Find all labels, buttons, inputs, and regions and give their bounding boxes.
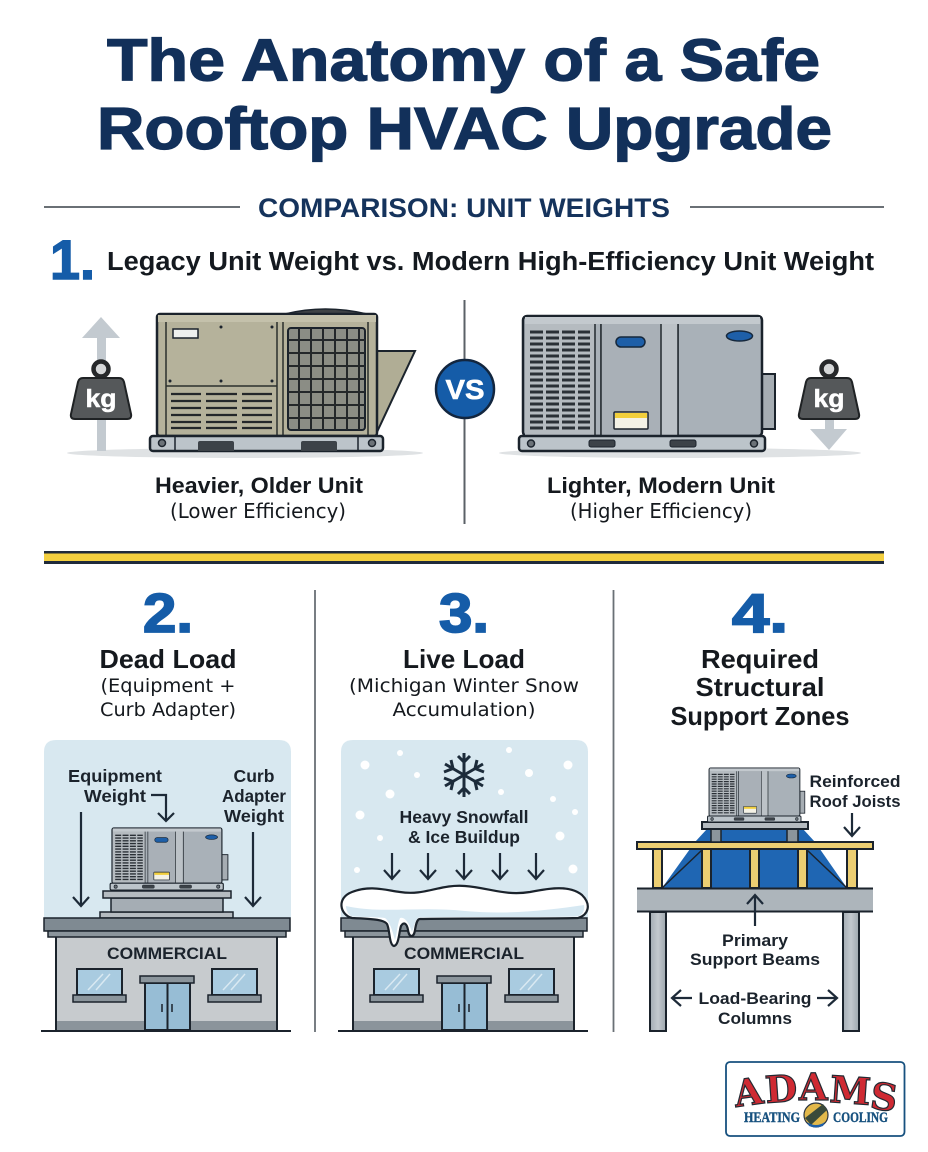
label: heavy snowfall: & Ice Buildup [408, 827, 520, 847]
label: equipment weight: Equipment [68, 766, 162, 786]
label: heavy snowfall [400, 807, 528, 847]
panel: modern unit [499, 316, 861, 523]
label: curb adapter weight: Adapter [222, 786, 286, 806]
heading: support zones [670, 582, 850, 731]
logo: Adams Heating & Cooling: HEATING [744, 1110, 800, 1126]
heading: dead load: 2. [143, 582, 193, 644]
icon: snowflake [444, 753, 484, 797]
section heading: comparison: COMPARISON: UNIT WEIGHTS [258, 193, 670, 223]
label: primary support beams: Primary [722, 931, 789, 950]
illustration panel: dead load [41, 740, 291, 1031]
heading: live load: Live Load [403, 644, 525, 674]
caption: heavier unit [155, 473, 364, 523]
label: load-bearing columns [672, 989, 837, 1028]
heading: dead load: Curb Adapter) [100, 699, 236, 721]
column 4: structural support [637, 582, 900, 1031]
heading: live load [349, 582, 579, 721]
icon: up arrow with weight [71, 317, 131, 451]
panel: legacy unit [67, 309, 423, 523]
heading: live load: (Michigan Winter Snow [349, 675, 579, 697]
caption: heavier unit: (Lower Efficiency) [170, 499, 346, 523]
label: curb adapter weight [222, 766, 286, 906]
label: reinforced roof joists [810, 772, 900, 836]
caption: lighter unit: Lighter, Modern Unit [547, 473, 776, 498]
label: reinforced roof joists: Reinforced [810, 772, 900, 791]
title [97, 28, 832, 162]
label: primary support beams: Support Beams [690, 950, 820, 969]
illustration: structural frame [637, 768, 873, 1031]
title: The Anatomy of a Safe [107, 28, 820, 94]
label: heavy snowfall: Heavy Snowfall [400, 807, 528, 827]
divider with VS badge: VS [446, 374, 484, 405]
illustration: commercial building [41, 918, 291, 1031]
illustration: commercial building: COMMERCIAL [404, 944, 524, 963]
title: Rooftop HVAC Upgrade [97, 96, 832, 162]
label: equipment weight [68, 766, 174, 906]
label: load-bearing columns: Columns [718, 1009, 792, 1028]
column 2: dead load [41, 582, 291, 1031]
illustration: legacy rooftop unit [150, 309, 415, 451]
caption: heavier unit: Heavier, Older Unit [155, 473, 364, 498]
heading: support zones: 4. [732, 582, 788, 644]
label: reinforced roof joists: Roof Joists [810, 792, 900, 811]
illustration: modern rooftop unit [519, 316, 775, 451]
illustration: commercial building [338, 918, 588, 1031]
divider with VS badge [436, 300, 494, 524]
heading 1: legacy vs modern: Legacy Unit Weight vs. Modern High-Efficiency Unit Weight [107, 248, 875, 276]
label: curb adapter weight: Weight [224, 806, 284, 826]
logo: Adams Heating & Cooling: COOLING [833, 1110, 888, 1126]
caption: lighter unit: (Higher Efficiency) [570, 499, 752, 523]
label: equipment weight: Weight [84, 786, 146, 806]
illustration panel: live load [338, 740, 588, 1031]
label: load-bearing columns: Load-Bearing [698, 989, 812, 1008]
heading: live load: 3. [439, 582, 489, 644]
heading: support zones: Required [701, 644, 819, 674]
icon: logo emblem [804, 1103, 828, 1128]
heading: live load: Accumulation) [392, 699, 536, 721]
label: curb adapter weight: Curb [234, 766, 274, 786]
yellow divider [44, 551, 884, 564]
snow dots [354, 747, 578, 874]
column 3: live load [338, 582, 588, 1031]
heading 1: legacy vs modern: 1. [50, 228, 95, 291]
label: primary support beams [690, 895, 820, 969]
heading: support zones: Structural [696, 672, 824, 702]
heading: dead load [100, 582, 236, 721]
heading: dead load: Dead Load [100, 644, 236, 674]
illustration: snow on roof [341, 886, 588, 946]
heading: support zones: Support Zones [670, 701, 850, 731]
caption: lighter unit [547, 473, 776, 523]
illustration: unit on curb adapter [100, 828, 233, 918]
heading 1: legacy vs modern [50, 228, 875, 291]
arrows: snow load [384, 853, 544, 879]
icon: down arrow with weight [799, 362, 859, 450]
logo: Adams Heating & Cooling: ADAMS [730, 1065, 900, 1121]
illustration: commercial building: COMMERCIAL [107, 944, 227, 963]
heading: dead load: (Equipment + [100, 675, 236, 697]
